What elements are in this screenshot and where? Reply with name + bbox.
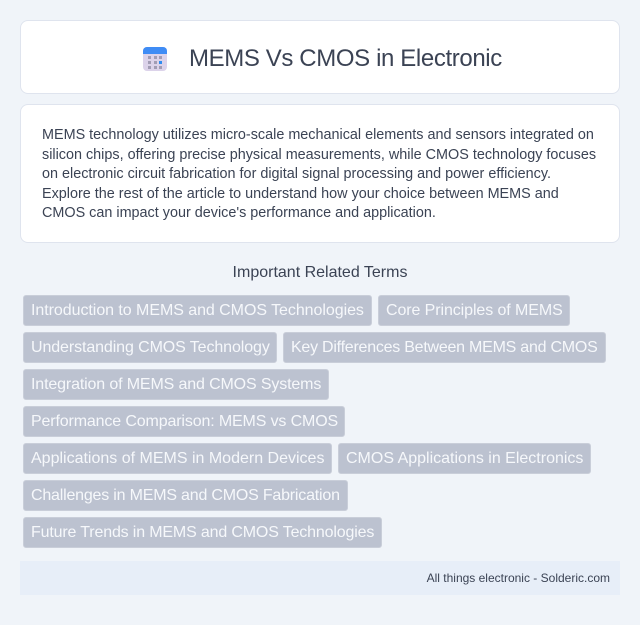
tag: Understanding CMOS Technology xyxy=(31,339,270,356)
title: MEMS Vs CMOS in Electronic xyxy=(189,45,502,72)
footer xyxy=(20,561,620,595)
tag xyxy=(378,295,570,326)
icon: calendar xyxy=(143,47,167,71)
tag: CMOS Applications in Electronics xyxy=(346,450,583,467)
tag xyxy=(23,517,382,548)
tag: Introduction to MEMS and CMOS Technologies xyxy=(31,302,364,319)
tag list xyxy=(23,295,606,548)
tag: Applications of MEMS in Modern Devices xyxy=(31,450,324,467)
tag: Integration of MEMS and CMOS Systems xyxy=(31,376,321,393)
tag xyxy=(23,369,329,400)
tag xyxy=(23,332,277,363)
tag: Key Differences Between MEMS and CMOS xyxy=(291,339,598,356)
intro text xyxy=(42,127,596,221)
tag xyxy=(283,332,606,363)
tag: Future Trends in MEMS and CMOS Technologies xyxy=(31,524,374,541)
intro text: on electronic circuit fabrication for digital signal processing and power efficiency. xyxy=(42,166,551,182)
tag: Performance Comparison: MEMS vs CMOS xyxy=(31,413,338,430)
title card xyxy=(20,20,620,94)
intro text: Explore the rest of the article to understand how your choice between MEMS and xyxy=(42,186,559,202)
tag xyxy=(338,443,591,474)
tag: Challenges in MEMS and CMOS Fabrication xyxy=(31,487,340,504)
panel: introduction xyxy=(20,104,620,243)
intro text: silicon chips, offering precise physical measurements, while CMOS technology focuses xyxy=(42,147,596,163)
tag xyxy=(23,480,348,511)
intro text: MEMS technology utilizes micro-scale mechanical elements and sensors integrated on xyxy=(42,127,594,143)
intro text: CMOS can impact your device's performance and application. xyxy=(42,205,436,221)
tag xyxy=(23,295,372,326)
tag xyxy=(23,406,345,437)
footer: All things electronic - Solderic.com xyxy=(427,571,610,585)
tag: Core Principles of MEMS xyxy=(386,302,563,319)
heading: related terms: Important Related Terms xyxy=(233,264,407,281)
tag xyxy=(23,443,332,474)
